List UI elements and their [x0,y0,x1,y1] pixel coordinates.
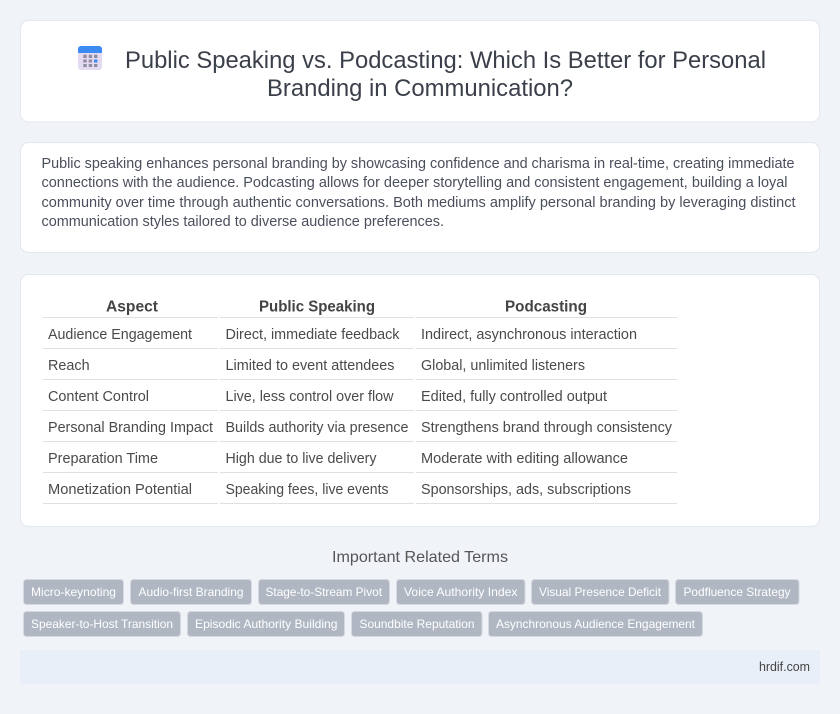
tags: related terms: Podfluence Strategy [684,585,790,599]
row: personal branding impact: Builds authority via presence [226,420,408,436]
row: personal branding impact [48,420,673,436]
tags: related terms: Asynchronous Audience Engagement [496,617,696,631]
row: audience engagement: Direct, immediate feedback [226,327,400,343]
table header: Aspect [106,298,159,316]
panel: summary [20,142,820,252]
tags: related terms: Stage-to-Stream Pivot [266,585,383,599]
row: reach: Global, unlimited listeners [421,358,585,374]
text block: summary paragraph: community over time through authentic conversations. Both mediums amplify personal branding by leveraging distinct [42,195,796,211]
tags: related terms [24,580,799,636]
tags: related terms: Speaker-to-Host Transition [31,617,173,631]
row: reach [48,358,585,374]
heading: related terms: Important Related Terms [332,549,508,566]
row: content control: Live, less control over flow [226,389,394,405]
row: reach: Limited to event attendees [226,358,394,374]
row: content control: Content Control [48,389,149,405]
panel: header [20,20,820,122]
text block: summary paragraph: communication styles tailored to diverse audience preferences. [42,214,444,230]
row: monetization potential: Speaking fees, live events [226,482,388,498]
title [125,47,766,102]
row: preparation time: Moderate with editing allowance [421,451,628,467]
text block: summary paragraph: connections with the audience. Podcasting allows for deeper storytelling and consistent engagement, building a loyal [42,175,788,191]
footer: hrdif.com [759,660,810,674]
panel: comparison table [20,274,820,526]
row: monetization potential: Monetization Potential [48,482,192,498]
table header: Public Speaking [259,298,375,316]
row: personal branding impact: Strengthens brand through consistency [421,420,673,436]
row: preparation time: Preparation Time [48,451,158,467]
tags: related terms: Soundbite Reputation [360,617,474,631]
tags: related terms: Visual Presence Deficit [539,585,662,599]
row: preparation time: High due to live delivery [226,451,377,467]
tags: related terms: Episodic Authority Building [195,617,338,631]
row: preparation time [48,451,628,467]
title: Branding in Communication? [267,75,573,102]
table header: Podcasting [505,298,587,316]
table header [106,298,587,316]
row: audience engagement [48,327,637,343]
row: personal branding impact: Personal Branding Impact [48,420,213,436]
row: reach: Reach [48,358,90,374]
row: monetization potential [48,482,631,498]
icon: calendar [78,46,102,70]
row: monetization potential: Sponsorships, ads, subscriptions [421,482,631,498]
row: content control: Edited, fully controlled output [421,389,607,405]
tags: related terms: Voice Authority Index [404,585,518,599]
tags: related terms: Micro-keynoting [31,585,116,599]
footer [20,650,820,684]
title: Public Speaking vs. Podcasting: Which Is Better for Personal [125,47,766,74]
tags: related terms: Audio-first Branding [138,585,244,599]
text block: summary paragraph [42,156,796,230]
row: content control [48,389,607,405]
row: audience engagement: Indirect, asynchronous interaction [421,327,637,343]
text block: summary paragraph: Public speaking enhances personal branding by showcasing confidence and charisma in real-time, creating immediate [42,156,794,172]
row: audience engagement: Audience Engagement [48,327,192,343]
